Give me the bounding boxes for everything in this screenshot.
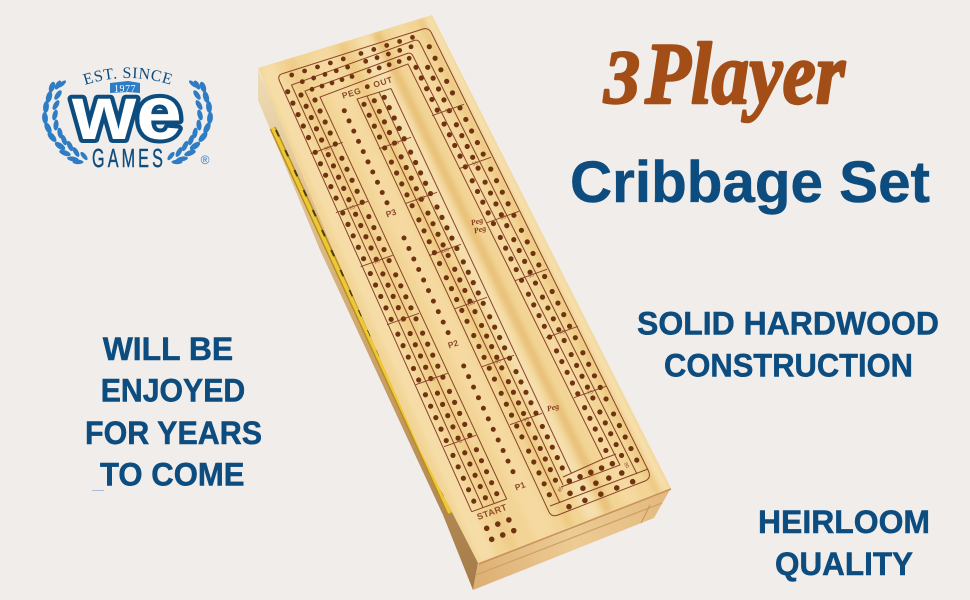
holes: centre line: [344, 111, 513, 472]
label: peg marks: Peg: [546, 402, 560, 413]
holes: right three lanes: [416, 47, 637, 461]
label: score numbers: 5: [458, 439, 463, 445]
text: solid hardwood construction: [637, 305, 939, 384]
label: score numbers: 65: [528, 272, 535, 280]
label: score numbers: 100: [466, 300, 476, 308]
label: peg marks: Peg: [470, 216, 484, 227]
board: front side face: [473, 488, 671, 590]
label: score numbers: 105: [440, 247, 450, 255]
text: will be enjoyed for years to come: [85, 331, 262, 493]
label: score numbers: 80: [622, 462, 630, 470]
label: start: START: [476, 502, 509, 522]
text: will be enjoyed for years to come: ENJOYED: [101, 373, 245, 409]
logo: games text: GAMES: [92, 143, 166, 173]
board: engraved track lines: [279, 29, 649, 516]
cribbage board: [258, 15, 671, 590]
text: solid hardwood construction: SOLID HARDWOOD: [637, 305, 939, 341]
holes: top three rows: [292, 37, 413, 89]
label: score numbers: 25: [349, 204, 356, 212]
label: score numbers: 20: [373, 258, 381, 266]
text: heirloom quality: HEIRLOOM: [758, 504, 930, 540]
label: p3: P3: [385, 207, 398, 219]
board: engraved text labels: [323, 74, 630, 522]
text: heirloom quality: QUALITY: [775, 546, 913, 582]
text: will be enjoyed for years to come: WILL BE: [103, 331, 233, 367]
label: score numbers: 70: [559, 329, 566, 337]
holes: start holes: [487, 520, 514, 539]
logo: 1977 badge: 1977: [114, 84, 136, 95]
text: solid hardwood construction: CONSTRUCTION: [664, 348, 913, 384]
holes: left three lanes: [288, 92, 497, 502]
label: score numbers: 110: [417, 195, 426, 203]
label: score numbers: 15: [400, 316, 407, 324]
label: p1: P1: [513, 479, 527, 492]
label: score numbers: [323, 107, 630, 493]
label: score numbers: 115: [391, 140, 400, 148]
board: left side face: [258, 70, 478, 590]
title: 3 Player: Player: [644, 26, 846, 123]
board: peg holes: [288, 37, 637, 539]
label: peg marks: [470, 216, 560, 413]
label: out: OUT: [372, 74, 394, 90]
logo: left laurel: [42, 79, 89, 164]
label: score numbers: 90: [523, 416, 530, 424]
title: 3 Player: 3: [603, 36, 640, 120]
board: brass hinge: [273, 128, 450, 513]
title: Cribbage Set: Cribbage Set: [570, 150, 930, 215]
logo: est. since arc text: EST. SINCE: [82, 67, 172, 85]
logo: 1977 badge: [110, 81, 140, 95]
text: will be enjoyed for years to come: TO COME: [100, 457, 244, 493]
label: score numbers: 75: [587, 389, 594, 397]
label: score numbers: 60: [500, 214, 507, 222]
label: score numbers: 55: [472, 160, 479, 168]
logo: we wordmark: we: [71, 71, 182, 156]
label: peg marks: Peg: [473, 224, 487, 235]
holes: peg out hole: [365, 84, 370, 89]
logo: WE Games: [42, 67, 213, 173]
text: heirloom quality: [758, 504, 930, 582]
label: p2: P2: [447, 338, 460, 350]
logo: registered mark: ®: [201, 153, 210, 167]
label: score numbers: 30: [323, 145, 331, 153]
label: score numbers: 85: [557, 485, 565, 493]
label: score numbers: 50: [445, 107, 452, 115]
label: score numbers: 95: [495, 358, 502, 366]
logo: right laurel: [166, 79, 213, 164]
text: will be enjoyed for years to come: FOR YEARS: [85, 415, 262, 451]
label: score numbers: 10: [428, 376, 436, 384]
holes: bottom three rows: [569, 464, 633, 507]
label: peg: PEG: [341, 85, 363, 101]
board: wooden top face: [258, 15, 671, 563]
holes: inner three lanes: [364, 97, 563, 495]
